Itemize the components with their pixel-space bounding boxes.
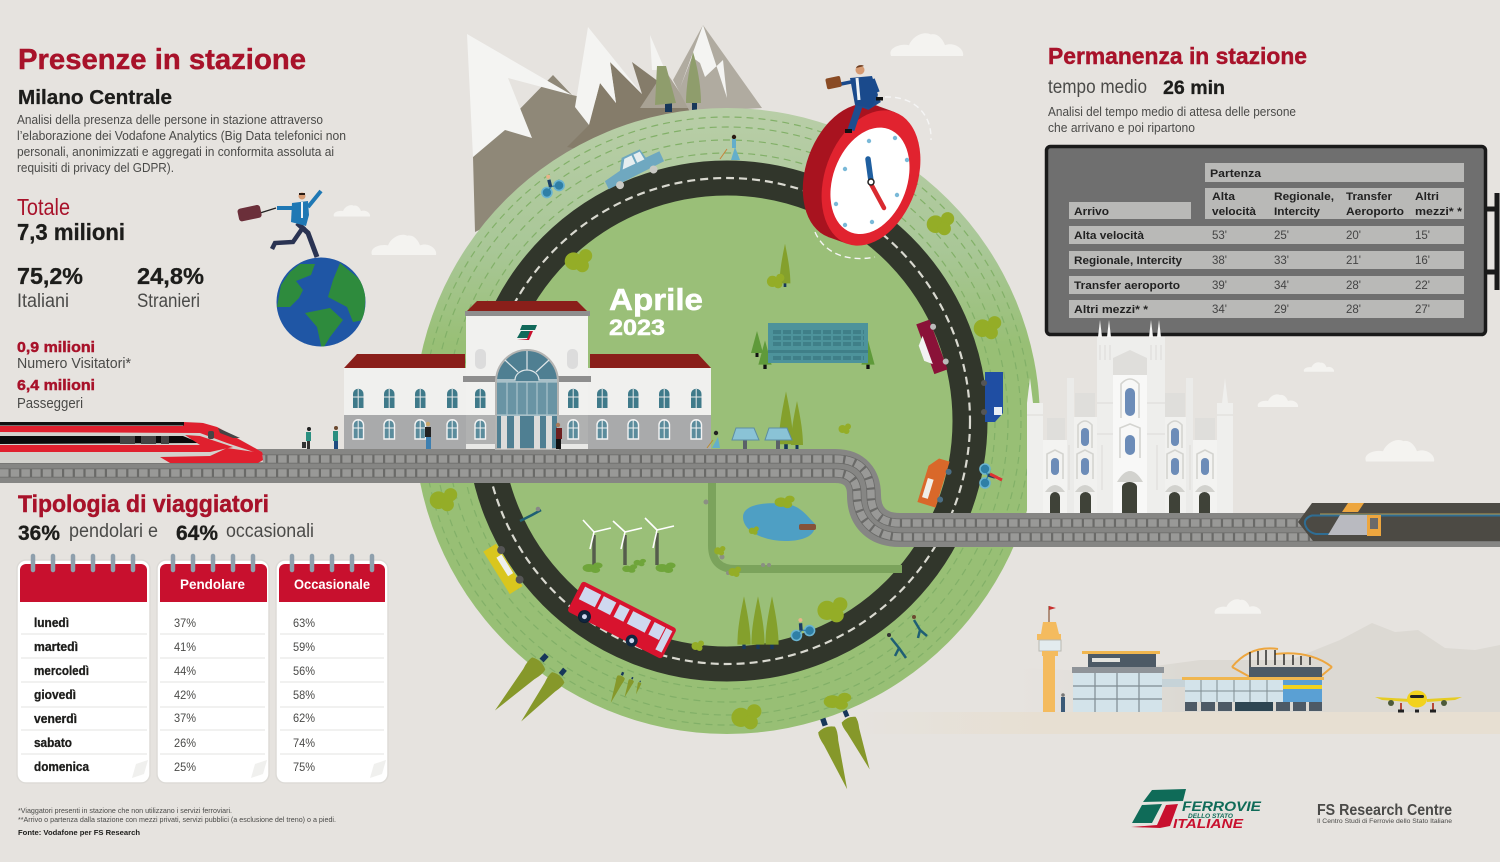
vehicles on the road <box>483 142 1003 662</box>
table values: 29' <box>1274 304 1289 316</box>
description of average time: che arrivano e poi ripartono <box>1048 121 1195 135</box>
table values: 25' <box>1274 230 1289 242</box>
logo: FS Research Centre: FS Research Centre <box>1317 802 1452 819</box>
clouds <box>334 33 1434 614</box>
mountains behind the circle <box>467 25 762 232</box>
Milan cathedral <box>1027 337 1233 513</box>
man running <box>237 191 321 257</box>
row labels: Transfer aeroporto <box>1074 280 1180 292</box>
central arched entrance <box>496 350 558 449</box>
wind turbines <box>583 518 676 573</box>
table values: 33' <box>1274 255 1289 267</box>
orange van <box>917 456 954 509</box>
bottom right distant mountains <box>1020 623 1500 712</box>
heading: presenze in stazione: Presenze in stazione <box>18 44 306 76</box>
description of average time <box>1048 105 1296 135</box>
maroon car <box>912 318 951 376</box>
ground strip <box>850 712 1500 734</box>
table values: 28' <box>1346 304 1361 316</box>
subheading: share of commuters and occasional: pendolari e <box>69 521 158 542</box>
globe <box>276 258 366 350</box>
logo: FS Research Centre: Il Centro Studi di Ferrovie dello Stato Italiane <box>1317 818 1452 825</box>
calendar: occasionale: 74% <box>293 736 315 750</box>
table header: Regionale, <box>1274 191 1334 203</box>
table header: Aeroporto <box>1346 206 1404 218</box>
subheading: share of commuters and occasional: occasionali <box>226 521 314 542</box>
stat: stranieri: Stranieri <box>137 291 200 312</box>
cyclists and pedestrians <box>520 135 1002 658</box>
cathedral doors <box>1050 482 1210 513</box>
upper windows <box>353 389 702 408</box>
calendar: pendolare: 37% <box>174 616 196 630</box>
red bus <box>566 581 677 662</box>
table values: 21' <box>1346 255 1361 267</box>
railway tracks <box>0 459 1500 537</box>
intro paragraph: l’elaborazione dei Vodafone Analytics (Big Data telefonici non <box>17 129 346 143</box>
table values <box>1212 230 1430 316</box>
calendar: occasionale: 62% <box>293 711 315 725</box>
subheading: milano centrale: Milano Centrale <box>18 87 172 109</box>
window frames and door pediments <box>1047 379 1213 479</box>
table values: 15' <box>1415 230 1430 242</box>
pond <box>743 496 816 541</box>
stat: passeggeri <box>17 377 95 412</box>
footnotes: **Arrivo o partenza dalla stazione con mezzi privati, servizi pubblici (a esclusione del treno) o a piedi. <box>18 815 336 824</box>
stat: italiani <box>17 263 83 312</box>
cathedral spires over the board <box>1098 320 1161 337</box>
calendar: days of week: mercoledì <box>34 664 89 678</box>
row labels <box>1074 230 1183 316</box>
table values: 16' <box>1415 255 1430 267</box>
path in park <box>704 483 902 577</box>
row labels: Regionale, Intercity <box>1074 255 1183 267</box>
intro paragraph <box>17 113 346 175</box>
calendar: occasionale: 56% <box>293 664 315 678</box>
calendar: pendolare: 25% <box>174 760 196 774</box>
average time: tempo medio <box>1048 77 1147 98</box>
table values: 38' <box>1212 255 1227 267</box>
big circle landscape <box>414 108 1040 734</box>
mountain trees <box>655 52 701 112</box>
calendar: pendolare: 44% <box>174 664 196 678</box>
red high speed train <box>0 422 263 463</box>
calendar: occasionale: 59% <box>293 640 315 654</box>
stat: total: 7,3 milioni <box>17 219 125 245</box>
stat: stranieri <box>137 263 204 312</box>
row labels: Alta velocità <box>1074 230 1145 242</box>
intro paragraph: Analisi della presenza delle persone in stazione attraverso <box>17 113 323 127</box>
stat: italiani: 75,2% <box>17 263 83 289</box>
calendar: days of week: giovedì <box>34 688 76 702</box>
yellow car <box>483 541 527 594</box>
logo: Ferrovie dello Stato Italiane: DELLO STATO <box>1188 813 1233 820</box>
stat: total: Totale <box>17 194 70 220</box>
calendar: occasionale: 75% <box>293 760 315 774</box>
calendar: pendolare: Pendolare <box>180 577 245 592</box>
trees and bushes in the park <box>430 212 1001 729</box>
stat: passeggeri: Passeggeri <box>17 395 83 412</box>
regional train <box>1298 503 1500 541</box>
calendar: days of week: martedì <box>34 640 78 654</box>
calendar: days of week: venerdì <box>34 712 77 726</box>
table header: Intercity <box>1274 206 1321 218</box>
board: arrival departure table <box>1046 146 1486 334</box>
table header: velocità <box>1212 206 1257 218</box>
road <box>484 178 970 664</box>
solar panels <box>732 428 792 449</box>
footnotes <box>18 806 336 837</box>
calendar: days of week: domenica <box>34 760 90 774</box>
month label <box>609 282 703 340</box>
lower windows <box>353 420 702 439</box>
calendar: days of week: sabato <box>34 736 72 750</box>
upside-down trees below the circle <box>488 649 877 792</box>
stat: passeggeri: 6,4 milioni <box>17 377 95 394</box>
table values: 27' <box>1415 304 1430 316</box>
table values: 20' <box>1346 230 1361 242</box>
footnotes: *Viaggatori presenti in stazione che non utilizzano i servizi ferroviari. <box>18 806 232 815</box>
clock <box>785 90 938 260</box>
terminal one <box>1072 651 1164 712</box>
station building <box>344 301 720 449</box>
runway people near train <box>302 426 338 449</box>
average time <box>1048 77 1225 99</box>
calendar: occasionale <box>276 556 388 783</box>
table values: 39' <box>1212 280 1227 292</box>
calendar: occasionale: Occasionale <box>294 577 370 592</box>
table values: 28' <box>1346 280 1361 292</box>
stat: italiani: Italiani <box>17 291 69 312</box>
table header: Arrivo <box>1074 206 1109 218</box>
calendar: days of week <box>17 556 150 783</box>
calendar: occasionale: 58% <box>293 688 315 702</box>
average time: 26 min <box>1163 78 1225 99</box>
cathedral windows <box>1051 388 1209 475</box>
clock with businessman <box>785 65 938 260</box>
row labels: Altri mezzi* * <box>1074 304 1149 316</box>
logo: Ferrovie dello Stato Italiane: ITALIANE <box>1173 816 1243 831</box>
sign bracket <box>1486 193 1497 290</box>
heading: tipologia di viaggiatori: Tipologia di viaggiatori <box>18 491 269 518</box>
subheading: share of commuters and occasional: 36% <box>18 522 60 545</box>
table header <box>1074 168 1463 218</box>
subheading: share of commuters and occasional: 64% <box>176 522 218 545</box>
month label: 2023 <box>609 315 665 340</box>
table header: mezzi* * <box>1415 206 1463 218</box>
heading: permanenza in stazione: Permanenza in stazione <box>1048 43 1307 69</box>
intro paragraph: personali, anonimizzati e aggregati in conformita assoluta ai <box>17 145 334 159</box>
traveller on the globe <box>237 191 366 350</box>
yellow plane <box>1375 690 1462 711</box>
stat: visitatori: 0,9 milioni <box>17 339 95 356</box>
solar building <box>768 323 868 363</box>
table values: 34' <box>1274 280 1289 292</box>
subheading: share of commuters and occasional <box>18 521 314 545</box>
calendar: pendolare: 37% <box>174 711 196 725</box>
table values: 34' <box>1212 304 1227 316</box>
table header: Alta <box>1212 191 1236 203</box>
logo: FS Research Centre <box>1317 802 1452 825</box>
calendar: days of week: lunedì <box>34 616 69 630</box>
description of average time: Analisi del tempo medio di attesa delle persone <box>1048 105 1296 119</box>
people at station <box>425 422 720 449</box>
calendar: pendolare: 42% <box>174 688 196 702</box>
FS logo on station <box>517 325 537 340</box>
table values: 22' <box>1415 280 1430 292</box>
table header: Partenza <box>1210 168 1262 180</box>
stat: total <box>17 194 125 245</box>
footnotes: Fonte: Vodafone per FS Research <box>18 828 140 837</box>
table header: Transfer <box>1346 191 1393 203</box>
intro paragraph: requisiti di privacy del GDPR). <box>17 161 174 175</box>
month label: Aprile <box>609 282 703 317</box>
stat: visitatori: Numero Visitatori* <box>17 355 131 372</box>
calendar: pendolare: 26% <box>174 736 196 750</box>
terminal two <box>1182 648 1332 711</box>
logo: Ferrovie dello Stato Italiane <box>1131 789 1262 831</box>
calendar: pendolare: 41% <box>174 640 196 654</box>
blue van <box>981 372 1003 422</box>
table values: 53' <box>1212 230 1227 242</box>
outer ring <box>414 108 1040 734</box>
logo: Ferrovie dello Stato Italiane: FERROVIE <box>1182 799 1262 814</box>
stat: visitatori <box>17 339 131 372</box>
calendar: pendolare <box>157 556 269 783</box>
businessman on clock <box>825 65 883 133</box>
airport <box>1037 606 1462 712</box>
calendar: occasionale: 63% <box>293 616 315 630</box>
stat: stranieri: 24,8% <box>137 263 204 289</box>
control tower <box>1037 606 1065 712</box>
blue pickup <box>599 142 667 194</box>
table header: Altri <box>1415 191 1439 203</box>
